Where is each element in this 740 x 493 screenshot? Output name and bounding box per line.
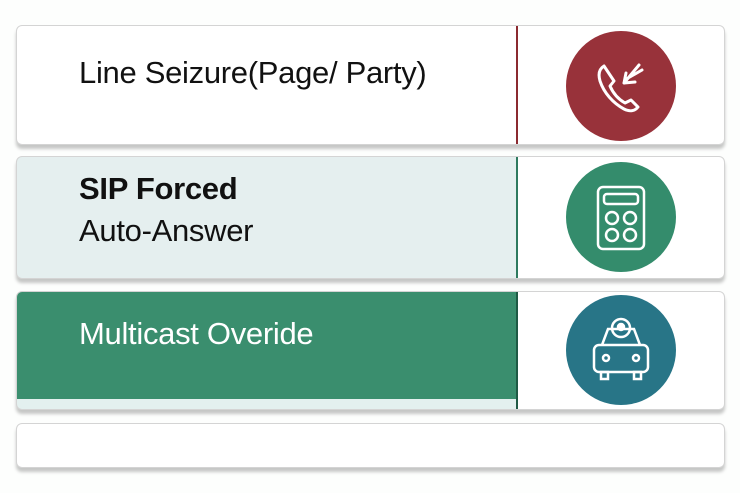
card 2: SIP Forced Auto-Answer	[16, 156, 725, 279]
text: SIP Forced: SIP Forced	[79, 171, 237, 206]
text: Auto-Answer: Auto-Answer	[79, 213, 253, 248]
text: Multicast Overide: Multicast Overide	[79, 316, 313, 351]
text: Line Seizure: Line Seizure(Page/ Party)	[79, 55, 426, 90]
icon: phone incoming	[566, 31, 676, 141]
icon: vehicle	[566, 295, 676, 405]
card 3: Multicast Overide	[16, 291, 725, 410]
icon: calculator	[566, 162, 676, 272]
card 1: Line Seizure	[16, 25, 725, 145]
card 4: empty	[16, 423, 725, 468]
